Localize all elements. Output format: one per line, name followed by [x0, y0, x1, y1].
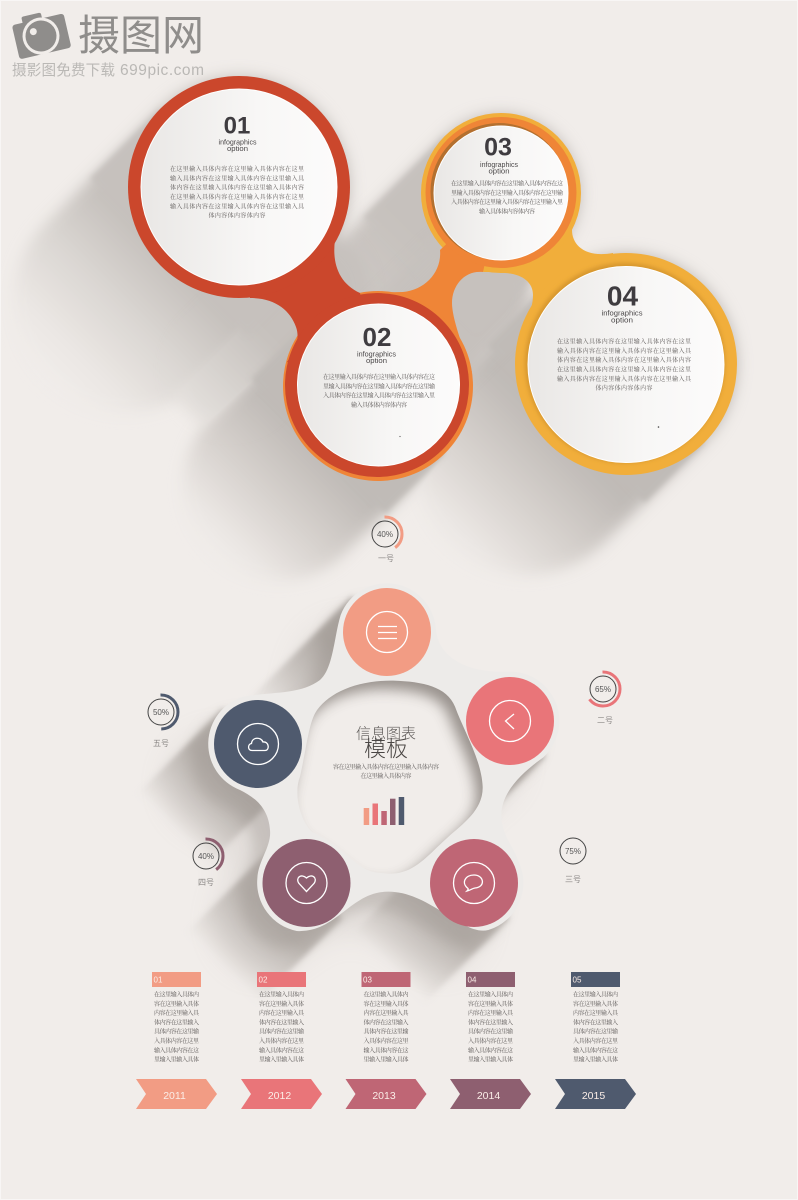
panel 01 — [141, 89, 337, 285]
text block: 输入具体内容在这 — [573, 1046, 618, 1054]
centre title — [333, 726, 439, 780]
timeline column 02 — [257, 972, 306, 1064]
gauge: 75%: 三号 — [565, 875, 581, 884]
arrow: 2014: 2014 — [477, 1090, 500, 1102]
node 4: heart — [262, 839, 350, 927]
text block: 入具体内容在这里 — [364, 1037, 408, 1045]
text block: 输入具体内容在这 — [154, 1046, 199, 1054]
timeline column 03 — [362, 972, 410, 1064]
body text — [451, 180, 563, 216]
text block — [364, 990, 409, 1064]
body text — [170, 165, 305, 220]
body text: 在这里输入具体内容在这里输入具体内容在这里 — [557, 366, 691, 374]
gauge: 40% lower left: 四号 — [198, 878, 214, 887]
header number: 04 — [468, 976, 477, 984]
text block: 内容在这里输入具 — [154, 1009, 200, 1017]
body text: 入具体内容在这里输入具体内容在这里输入里 — [451, 198, 563, 206]
text block: 容在这里输入具体 — [573, 1000, 618, 1008]
gauge: 40% lower left: 40% — [198, 852, 214, 861]
body text: 输入具体内容在这里输入具体内容在这里输入具 — [170, 174, 305, 182]
gauge: 40% top: 40% — [377, 530, 393, 539]
connector: orange — [360, 193, 501, 386]
watermark logo — [10, 8, 204, 79]
body text: 在这里输入具体内容在这里输入具体内容在这里 — [557, 338, 691, 346]
gauge: 40% top: 一号 — [378, 554, 394, 563]
number: 01 — [224, 112, 250, 140]
text block: 入具体内容在这里 — [468, 1037, 513, 1045]
text block: 在这里输入具体内 — [364, 990, 408, 998]
icon: speech bubble — [454, 862, 494, 904]
label line 2: option — [366, 358, 387, 365]
header — [466, 972, 515, 987]
arrow: 2011: 2011 — [163, 1090, 186, 1102]
body text: 在这里输入具体内容在这里输入具体内容在这 — [451, 180, 563, 188]
node 1: menu — [343, 588, 431, 676]
text block: 里输入里输入具体 — [468, 1056, 513, 1064]
text block — [259, 990, 305, 1064]
gauge: 65%: 65% — [595, 685, 611, 694]
disc — [430, 839, 518, 927]
arrow: 2014 — [450, 1079, 531, 1109]
text block: 内容在这里输入具 — [364, 1009, 409, 1017]
logo tagline: 摄影图免费下载 — [12, 62, 115, 79]
gauge: 40% lower left — [189, 839, 223, 887]
text block: 内容在这里输入具 — [259, 1009, 305, 1017]
body text: 体内容在这里输入具体内容在这里输入具体内容 — [170, 184, 304, 192]
body text: 输入具体内容在这里输入具体内容在这里输入具 — [557, 375, 692, 383]
body text: 体内容在这里输入具体内容在这里输入具体内容 — [557, 356, 691, 364]
text block: 体内容在这里输入 — [154, 1018, 199, 1026]
circle 03 crescent — [430, 123, 568, 260]
text block: 输入具体内容在这 — [468, 1046, 513, 1054]
circle 03 orange ring — [426, 117, 576, 268]
gauge: 75% — [560, 838, 586, 884]
circle 04 ring — [515, 253, 737, 475]
body text: 在这里输入具体内容在这里输入具体内容在这 — [323, 373, 435, 381]
icon: cloud — [238, 724, 278, 764]
text block: 具体内容在这里输 — [259, 1028, 304, 1036]
disc — [214, 700, 302, 788]
circle 01 ring — [128, 76, 350, 298]
text block: 里输入里输入具体 — [573, 1056, 618, 1064]
arrow: 2012: 2012 — [268, 1090, 291, 1102]
label: infographics — [218, 140, 257, 146]
body text: 在这里输入具体内容在这里输入具体内容在这里 — [170, 165, 304, 173]
text block: 内容在这里输入具 — [468, 1009, 514, 1017]
text block: 体内容在这里输入 — [573, 1018, 618, 1026]
cut-out inner shadow — [298, 680, 483, 874]
text block: 入具体内容在这里 — [154, 1037, 199, 1045]
panel 02 — [298, 304, 460, 466]
panel 03 — [434, 126, 568, 260]
text block: 里输入里输入具体 — [259, 1056, 304, 1064]
circle 02 red ring — [285, 293, 469, 477]
heading line 1: 信息图表 — [356, 726, 416, 742]
text block: 体内容在这里输入 — [468, 1018, 513, 1026]
text block: 体内容在这里输入 — [364, 1018, 408, 1026]
node 2: back — [466, 677, 554, 765]
gauge: 50% — [144, 695, 178, 748]
body text: 输入具体体内容体内容 — [479, 208, 535, 216]
panel 04 — [528, 266, 724, 462]
long shadows of the ring diagram — [173, 632, 510, 968]
header number: 05 — [572, 976, 582, 984]
node 5: cloud — [214, 700, 302, 788]
text block: 容在这里输入具体 — [468, 1000, 513, 1008]
label line 2: option — [611, 318, 633, 324]
icon: camera — [10, 8, 71, 60]
gauge: 65% — [586, 672, 620, 725]
body text: 体内容体内容体内容 — [208, 212, 266, 220]
gauge: 50%: 50% — [153, 708, 169, 717]
subtitle: 容在这里输入具体内容在这里输入具体内容 — [333, 763, 439, 771]
text block: 在这里输入具体内 — [573, 990, 618, 998]
body text: 输入具体内容在这里输入具体内容在这里输入具 — [557, 347, 692, 355]
text block: 里输入里输入具体 — [364, 1056, 408, 1064]
text block: 内容在这里输入具 — [573, 1009, 619, 1017]
disc — [343, 588, 431, 676]
linked circles diagram — [128, 76, 737, 481]
circle 04 inner shade — [525, 263, 725, 463]
body text: 入具体内容在这里输入具体内容在这里输入里 — [323, 392, 435, 400]
header number: 03 — [363, 976, 372, 984]
connector: red — [239, 187, 378, 385]
arrow: 2012 — [241, 1079, 322, 1109]
label: infographics — [357, 352, 397, 358]
timeline column 01 — [152, 972, 201, 1064]
body text: 输入具体体内容体内容 — [351, 401, 407, 409]
text block: 具体内容在这里输 — [154, 1028, 199, 1036]
number: 04 — [607, 281, 638, 312]
header number: 02 — [258, 976, 268, 984]
body text: 里输入具体内容在这里输入具体内容在这里输 — [451, 189, 563, 197]
number: 03 — [484, 134, 512, 162]
text block: 里输入里输入具体 — [154, 1056, 199, 1064]
arrow: 2015 — [555, 1079, 636, 1109]
body text: 里输入具体内容在这里输入具体内容在这里输 — [323, 382, 435, 390]
text block — [573, 990, 619, 1064]
bar chart — [364, 797, 404, 825]
body text: 体内容体内容体内容 — [596, 384, 652, 392]
text block: 容在这里输入具体 — [364, 1000, 408, 1008]
connector: yellow — [483, 193, 626, 364]
text block: 具体内容在这里输 — [364, 1028, 408, 1036]
text block: 在这里输入具体内 — [154, 990, 199, 998]
arrow: 2013 — [346, 1079, 426, 1109]
body text — [557, 338, 692, 392]
circle 03 outer ring — [421, 113, 581, 273]
text block: 入具体内容在这里 — [573, 1037, 618, 1045]
timeline column 04 — [466, 972, 515, 1064]
header number: 01 — [154, 976, 163, 984]
text block: 容在这里输入具体 — [259, 1000, 304, 1008]
five-node ring diagram — [180, 596, 546, 962]
arrow: 2015: 2015 — [582, 1090, 605, 1102]
icon: menu — [366, 612, 408, 652]
label line 2: option — [488, 168, 510, 176]
disc — [141, 89, 337, 285]
speck — [399, 436, 401, 437]
label: infographics — [602, 310, 643, 318]
ring base — [208, 583, 559, 931]
node 3: speech — [430, 839, 518, 927]
gauge: 40% top — [368, 517, 402, 563]
text block: 输入具体内容在这 — [364, 1046, 408, 1054]
disc — [298, 304, 460, 466]
disc — [528, 266, 724, 462]
ring shadow far — [168, 623, 519, 971]
label: infographics — [480, 162, 518, 169]
speck — [658, 426, 659, 428]
ring centre cut-out — [297, 681, 483, 874]
header — [571, 972, 620, 987]
header — [257, 972, 306, 987]
logo url: 699pic.com — [120, 62, 204, 79]
text block: 在这里输入具体内 — [259, 990, 304, 998]
label line 2: option — [227, 146, 248, 153]
logo name: 摄图网 — [78, 12, 204, 59]
icon: heart — [286, 862, 327, 904]
text block: 具体内容在这里输 — [468, 1028, 513, 1036]
disc — [466, 677, 554, 765]
body text — [323, 373, 435, 409]
text block: 容在这里输入具体 — [154, 1000, 199, 1008]
number: 02 — [363, 322, 391, 352]
circle 02 orange ring — [283, 291, 473, 481]
body text: 在这里输入具体内容在这里输入具体内容在这里 — [170, 193, 304, 201]
text block: 输入具体内容在这 — [259, 1046, 304, 1054]
gauge: 50%: 五号 — [153, 739, 169, 748]
timeline column 05 — [571, 972, 620, 1064]
body text: 输入具体内容在这里输入具体内容在这里输入具 — [170, 202, 305, 210]
ring shadow near — [192, 600, 543, 948]
subtitle line 2: 在这里输入具体内容 — [360, 772, 412, 780]
heading line 2: 模板 — [364, 736, 408, 762]
text block: 具体内容在这里输 — [573, 1028, 618, 1036]
gauge: 65%: 二号 — [597, 716, 613, 725]
text block: 在这里输入具体内 — [468, 990, 513, 998]
disc — [262, 839, 350, 927]
header — [362, 972, 410, 987]
text block: 体内容在这里输入 — [259, 1018, 304, 1026]
disc — [434, 126, 568, 260]
gauge: 75%: 75% — [565, 847, 581, 856]
arrow: 2013: 2013 — [372, 1090, 396, 1102]
long shadows of the top diagram — [124, 187, 626, 486]
text block — [154, 990, 200, 1064]
text block: 入具体内容在这里 — [259, 1037, 304, 1045]
arrow: 2011 — [136, 1079, 217, 1109]
icon: chevron — [490, 700, 530, 742]
text block — [468, 990, 514, 1064]
header — [152, 972, 201, 987]
